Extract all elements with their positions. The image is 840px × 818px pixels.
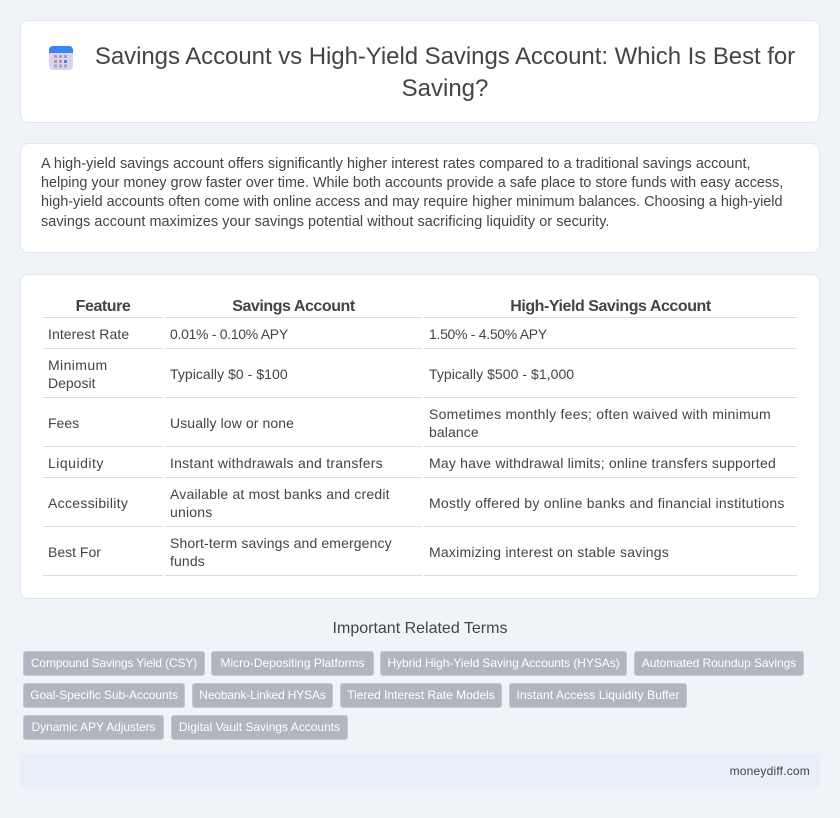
column headers: Savings Account [232, 298, 355, 315]
row: liquidity [48, 455, 776, 471]
intro text [41, 156, 783, 230]
row: minimum deposit: Typically $0 - $100 [170, 366, 288, 382]
row: accessibility [48, 486, 785, 520]
row: best for: Maximizing interest on stable savings [429, 544, 669, 560]
row: interest rate: 1.50% - 4.50% APY [429, 326, 547, 342]
row: best for: funds [170, 553, 205, 569]
column headers [76, 298, 711, 315]
row: minimum deposit: Deposit [48, 375, 95, 391]
related term tags: Compound Savings Yield (CSY) [31, 656, 197, 670]
footer text: moneydiff.com [730, 764, 810, 778]
related term tags: Digital Vault Savings Accounts [179, 720, 340, 734]
intro text: A high-yield savings account offers significantly higher interest rates compared to a traditional savings account, [41, 156, 751, 172]
footer bar [20, 754, 820, 788]
intro panel [20, 143, 820, 253]
related term tags: Tiered Interest Rate Models [347, 688, 495, 702]
row: liquidity: May have withdrawal limits; online transfers supported [429, 455, 776, 471]
related term tags: Micro-Depositing Platforms [220, 656, 365, 670]
related term tags: Hybrid High-Yield Saving Accounts (HYSAs) [387, 656, 620, 670]
row: fees: Usually low or none [170, 415, 294, 431]
related term tags: Goal-Specific Sub-Accounts [30, 688, 178, 702]
row: interest rate: 0.01% - 0.10% APY [170, 326, 288, 342]
row: accessibility: unions [170, 504, 212, 520]
row: best for: Best For [48, 544, 101, 560]
row: liquidity: Liquidity [48, 455, 104, 471]
intro text: helping your money grow faster over time. While both accounts provide a safe place to store funds with easy access, [41, 175, 783, 191]
row: accessibility: Accessibility [48, 495, 128, 511]
row: best for: Short-term savings and emergency [170, 535, 392, 551]
related terms heading: Important Related Terms [333, 620, 507, 637]
row: minimum deposit [48, 357, 574, 391]
icon: calendar [49, 46, 73, 70]
title: Savings Account vs High-Yield Savings Account: Which Is Best for [95, 43, 795, 70]
related term tags: Neobank-Linked HYSAs [199, 688, 326, 702]
related term tags [23, 651, 804, 740]
title [95, 43, 795, 102]
row: fees: Sometimes monthly fees; often waived with minimum [429, 406, 771, 422]
row: best for [48, 535, 669, 569]
related term tags: Dynamic APY Adjusters [32, 720, 155, 734]
column headers: High-Yield Savings Account [510, 298, 711, 315]
row: accessibility: Mostly offered by online banks and financial institutions [429, 495, 785, 511]
related term tags: Instant Access Liquidity Buffer [517, 688, 679, 702]
row: interest rate: Interest Rate [48, 326, 129, 342]
row: liquidity: Instant withdrawals and transfers [170, 455, 383, 471]
table panel [20, 274, 820, 599]
row: minimum deposit: Typically $500 - $1,000 [429, 366, 574, 382]
title: Saving? [402, 75, 488, 102]
column headers: Feature [76, 298, 130, 315]
header panel [20, 20, 820, 123]
related term tags: Automated Roundup Savings [642, 656, 796, 670]
row: accessibility: Available at most banks and credit [170, 486, 390, 502]
row: interest rate [48, 326, 547, 342]
row: minimum deposit: Minimum [48, 357, 108, 373]
row: fees: balance [429, 424, 479, 440]
comparison table [43, 298, 797, 576]
row: fees: Fees [48, 415, 79, 431]
row: fees [48, 406, 771, 440]
intro text: high-yield accounts often come with online access and may require higher minimum balances. Choosing a high-yield [41, 194, 783, 210]
intro text: savings account maximizes your savings potential without sacrificing liquidity or security. [41, 214, 610, 230]
row lines [43, 317, 797, 576]
